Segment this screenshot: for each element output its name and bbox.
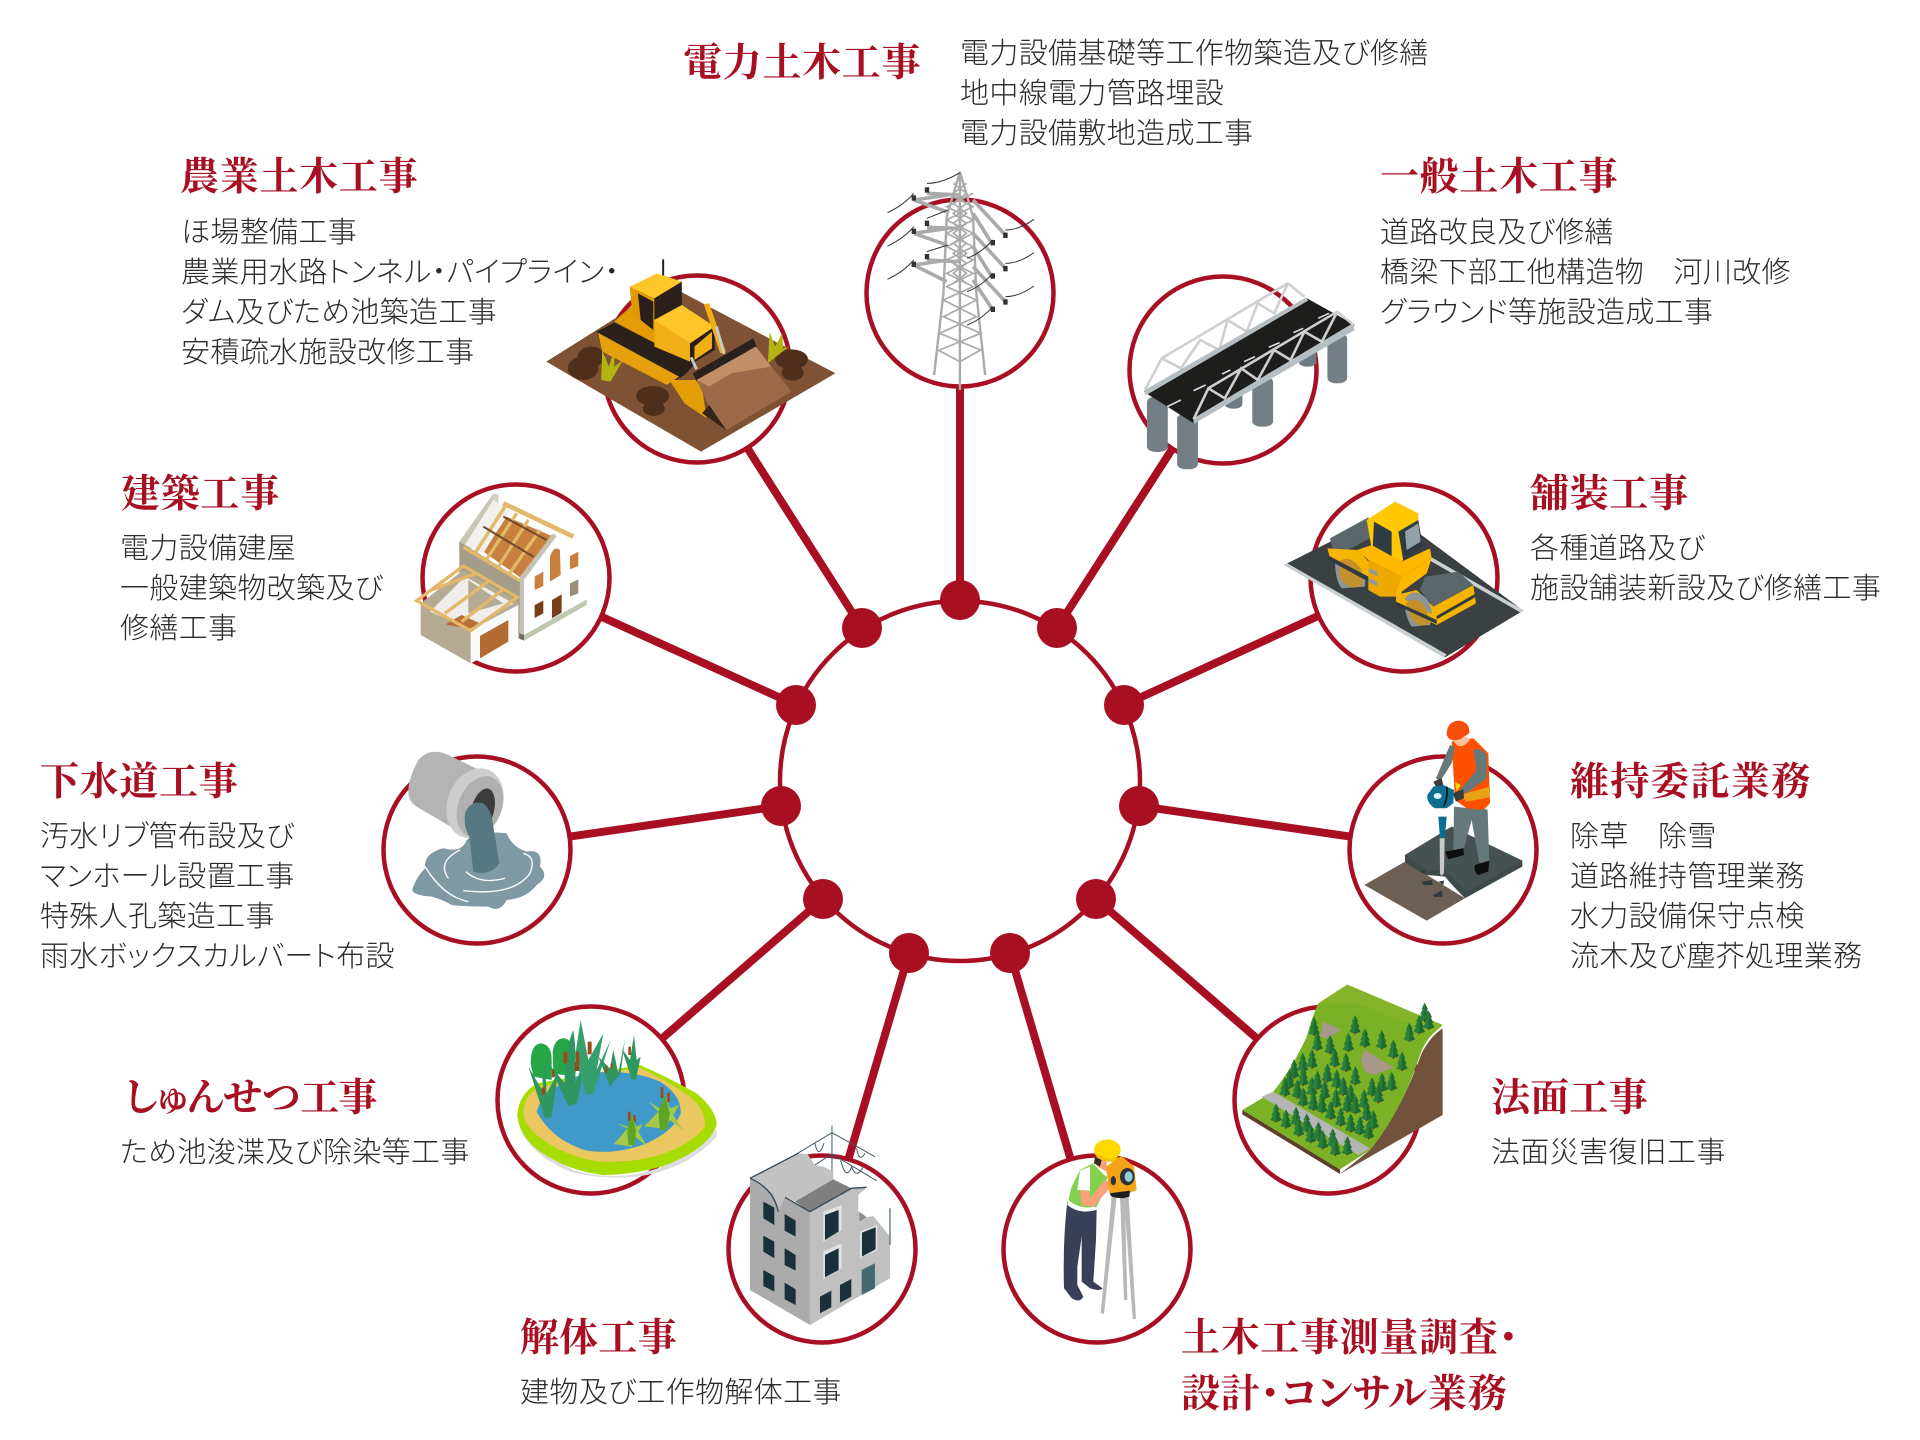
- heading: 建築工事: 建築工事: [121, 473, 280, 516]
- text: 農業土木工事 details: ほ場整備工事: [181, 217, 357, 249]
- icon: forested slope: [1242, 985, 1443, 1174]
- text: 法面工事 details: 法面災害復旧工事: [1491, 1137, 1726, 1169]
- text: 農業土木工事 details: 安積疏水施設改修工事: [181, 337, 475, 369]
- text: 維持委託業務 details: 水力設備保守点検: [1570, 901, 1805, 933]
- icon: sewer pipe: [408, 752, 544, 909]
- icon: road roller: [1284, 502, 1523, 658]
- icon: house under construction: [417, 493, 587, 663]
- icon: bridge: [1144, 283, 1355, 469]
- icon circles: [384, 200, 1536, 1342]
- heading: 農業土木工事: 農業土木工事: [180, 156, 418, 199]
- text: 解体工事 details: 建物及び工作物解体工事: [520, 1377, 842, 1409]
- heading: 土木工事測量調査・設計・コンサル業務: [1181, 1317, 1519, 1416]
- heading: 舗装工事: 舗装工事: [1530, 473, 1689, 516]
- text: 建築工事 details: [120, 533, 383, 645]
- text: 農業土木工事 details: 農業用水路トンネル・パイプライン・: [181, 257, 619, 289]
- text: 維持委託業務 details: 除草 除雪: [1570, 821, 1717, 853]
- text: 下水道工事 details: 汚水リブ管布設及び: [40, 821, 294, 853]
- heading: 土木工事測量調査・設計・コンサル業務: 土木工事測量調査・: [1181, 1317, 1519, 1360]
- spokes: [477, 293, 1443, 1249]
- text: 下水道工事 details: [40, 821, 395, 973]
- text: 電力土木工事 details: 地中線電力管路埋設: [960, 78, 1224, 110]
- text: 維持委託業務 details: [1570, 821, 1862, 973]
- heading: 維持委託業務: 維持委託業務: [1570, 761, 1811, 804]
- text: 建築工事 details: 電力設備建屋: [120, 533, 296, 565]
- text: 電力土木工事 details: 電力設備基礎等工作物築造及び修繕: [960, 38, 1429, 70]
- text: 一般土木工事 details: [1380, 217, 1791, 329]
- text: 舗装工事 details: 施設舗装新設及び修繕工事: [1530, 573, 1881, 605]
- icon: transmission tower: [887, 172, 1034, 390]
- text: 維持委託業務 details: 流木及び塵芥処理業務: [1570, 941, 1862, 973]
- text: 下水道工事 details: マンホール設置工事: [40, 861, 295, 893]
- central ring: [780, 601, 1140, 961]
- text: 舗装工事 details: 各種道路及び: [1530, 533, 1705, 565]
- text: 建築工事 details: 修繕工事: [120, 613, 237, 645]
- text: 舗装工事 details: [1530, 533, 1881, 605]
- icon: demolished building: [750, 1126, 890, 1325]
- text: 一般土木工事 details: 道路改良及び修繕: [1380, 217, 1614, 249]
- text: 電力土木工事 details: [960, 38, 1429, 150]
- text: 一般土木工事 details: 橋梁下部工他構造物 河川改修: [1380, 257, 1791, 289]
- heading: 法面工事: 法面工事: [1491, 1077, 1648, 1120]
- text: 維持委託業務 details: 道路維持管理業務: [1570, 861, 1805, 893]
- text: 電力土木工事 details: 電力設備敷地造成工事: [960, 118, 1254, 150]
- text: しゅんせつ工事 details: ため池浚渫及び除染等工事: [120, 1137, 470, 1169]
- text: 下水道工事 details: 雨水ボックスカルバート布設: [40, 941, 395, 973]
- text: 一般土木工事 details: グラウンド等施設造成工事: [1380, 297, 1713, 329]
- icon: bulldozer: [546, 259, 835, 452]
- heading: しゅんせつ工事: しゅんせつ工事: [124, 1077, 376, 1120]
- icon: road worker with jackhammer: [1364, 721, 1522, 921]
- text: 下水道工事 details: 特殊人孔築造工事: [40, 901, 275, 933]
- text: 建築工事 details: 一般建築物改築及び: [120, 573, 383, 605]
- heading: 一般土木工事: 一般土木工事: [1380, 156, 1618, 199]
- icon: pond with reeds: [517, 1020, 717, 1178]
- icon: surveyor with theodolite: [1064, 1139, 1137, 1319]
- text: 農業土木工事 details: ダム及びため池築造工事: [181, 297, 497, 329]
- text: 農業土木工事 details: [181, 217, 619, 369]
- heading: 土木工事測量調査・設計・コンサル業務: 設計・コンサル業務: [1181, 1373, 1507, 1416]
- heading: 解体工事: 解体工事: [520, 1317, 677, 1360]
- heading: 下水道工事: 下水道工事: [40, 761, 239, 804]
- heading: 電力土木工事: 電力土木工事: [683, 42, 921, 85]
- ring nodes: [761, 580, 1159, 973]
